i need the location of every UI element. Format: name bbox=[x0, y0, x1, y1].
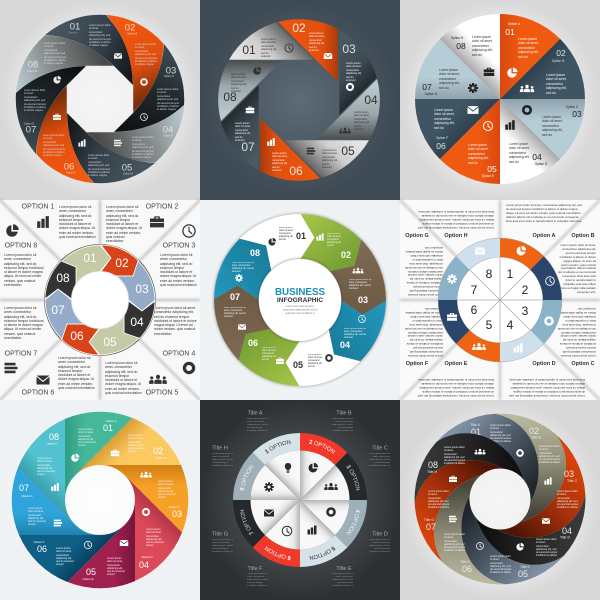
arrow ring: 07 bbox=[51, 303, 65, 317]
segment 08: 08 bbox=[28, 60, 38, 70]
segment 08: 08 bbox=[49, 432, 59, 442]
arrow ring: 08 bbox=[56, 271, 70, 285]
curved option labels: 2 OPTION bbox=[309, 440, 336, 454]
segment 03: Option C bbox=[164, 74, 174, 78]
segment 08: 08 bbox=[428, 460, 438, 470]
segment 02: Option B bbox=[156, 456, 167, 460]
segment 08: 08 bbox=[456, 41, 466, 51]
step numbers: 03 bbox=[358, 295, 368, 305]
title text blocks: Lorem ipsum dolor sit amet, consectetur adipiscing elit, sed do eiusmod tempor incididunt ut labore et bbox=[332, 573, 353, 587]
wheel: 7 bbox=[471, 283, 478, 297]
text blocks: Lorem ipsum dolor sit amet, consectetur adipiscing elit, sed do eiusmod tempor incididunt ut labore et dolore magna aliqua. Ut enim ad minim veniam, quis nostrud exercitation bbox=[154, 306, 197, 336]
centre circle title: Lorem ipsum dolor sit amet, bbox=[286, 305, 315, 308]
segment 08: Option H bbox=[451, 36, 464, 40]
step numbers: 02 bbox=[341, 250, 351, 260]
segment 03: Option C bbox=[168, 505, 180, 509]
segment 04 bbox=[77, 475, 187, 585]
segment 03 bbox=[297, 28, 384, 115]
segment 04: Option D bbox=[163, 134, 173, 138]
segment 07: Lorem ipsum dolor sit amet, consectetur adipiscing elit, sed do eiusmod tempor incididunt ut labore bbox=[428, 490, 449, 509]
segment 03: Lorem ipsum dolor sit amet, consectetur adipiscing elit, sed do bbox=[542, 115, 563, 137]
segment 04: 04 bbox=[364, 93, 378, 107]
segment 01: 01 bbox=[471, 427, 481, 437]
segment 07 bbox=[16, 66, 86, 154]
outer ring bbox=[219, 419, 381, 581]
segment 03: 03 bbox=[564, 469, 574, 479]
text blocks: Lorem ipsum dolor sit amet, consectetur adipiscing elit, sed do bbox=[327, 233, 341, 247]
segment 06 bbox=[412, 469, 548, 600]
segment 03: 03 bbox=[166, 66, 176, 76]
text blocks: Lorem ipsum dolor sit amet, consectetur adipiscing elit, sed do bbox=[279, 227, 293, 241]
segment 02: 02 bbox=[529, 426, 539, 436]
wheel: 5 bbox=[486, 318, 493, 332]
option headings: Option E bbox=[445, 361, 468, 367]
option headings: OPTION 2 bbox=[146, 204, 178, 210]
segment 07: 07 bbox=[241, 140, 255, 154]
text blocks bbox=[4, 205, 197, 400]
option icons bbox=[4, 216, 196, 385]
segment 08 bbox=[440, 0, 542, 99]
title labels bbox=[212, 410, 388, 572]
panel: numbered wheel with option blocks bbox=[400, 200, 600, 400]
panel: octagon shutter with spiral blades bbox=[0, 0, 200, 200]
segment 08: Option H bbox=[27, 69, 37, 73]
segment 04: Option D bbox=[141, 555, 153, 559]
title labels: Title E bbox=[336, 566, 352, 572]
segment 08 bbox=[2, 16, 113, 128]
arrow ring: 06 bbox=[70, 329, 84, 343]
option headings: Option C bbox=[571, 361, 595, 367]
segment 06: Option F bbox=[34, 540, 45, 544]
arrow ring: 03 bbox=[135, 282, 149, 296]
title labels: Title F bbox=[247, 566, 263, 572]
segment 01 bbox=[45, 15, 133, 85]
text blocks bbox=[404, 204, 596, 397]
segment 05 bbox=[68, 500, 135, 588]
curved option labels: 3 OPTION bbox=[346, 464, 360, 490]
segment 08 bbox=[13, 415, 123, 525]
title labels: Title H bbox=[212, 446, 228, 452]
segment 07: Title G bbox=[424, 518, 434, 522]
segment 01: 01 bbox=[242, 43, 256, 57]
segment 08: Lorem ipsum dolor sit amet, consectetur adipiscing elit, sed do eiusmod tempor incididunt ut labore bbox=[444, 446, 465, 465]
segment 07 bbox=[415, 39, 500, 99]
wheel bbox=[425, 225, 575, 375]
segment 07 bbox=[12, 468, 100, 535]
arrow ring: 05 bbox=[103, 335, 117, 349]
title text blocks: Lorem ipsum dolor sit amet, consectetur adipiscing elit, sed do eiusmod tempor incididunt ut labore et bbox=[369, 539, 390, 553]
segment 01: Option A bbox=[508, 22, 521, 26]
step numbers: 07 bbox=[230, 292, 240, 302]
segment 06: Title F bbox=[460, 560, 470, 564]
segment 07: Option G bbox=[21, 494, 33, 498]
segment 01: 01 bbox=[505, 27, 515, 37]
option headings: Option G bbox=[405, 233, 429, 239]
centre circle title: INFOGRAPHIC bbox=[277, 297, 323, 304]
option headings: Option F bbox=[406, 361, 429, 367]
title labels: Title D bbox=[372, 532, 388, 538]
curved option labels: 4 OPTION bbox=[346, 509, 360, 536]
segment 06: 06 bbox=[462, 564, 472, 574]
title text blocks: Lorem ipsum dolor sit amet, consectetur adipiscing elit, sed do eiusmod tempor incididunt ut labore et bbox=[369, 453, 390, 467]
segment 06: Lorem ipsum dolor sit amet, consectetur adipiscing elit, sed do bbox=[434, 108, 455, 130]
segment 05: 05 bbox=[341, 144, 355, 158]
segment 04: Lorem ipsum dolor sit amet, consectetur adipiscing elit, sed do eiusmod tempor incididunt ut labore bbox=[536, 538, 557, 557]
segment 05: 05 bbox=[122, 162, 132, 174]
title labels: Title G bbox=[212, 532, 228, 538]
segment 07: 07 bbox=[19, 483, 29, 493]
segment 01: Title A bbox=[470, 423, 480, 427]
segment 01 bbox=[65, 412, 132, 500]
option headings: Option H bbox=[444, 233, 468, 239]
segment 01: Option A bbox=[106, 419, 116, 423]
segment 03 bbox=[500, 99, 585, 159]
segment 06: Option F bbox=[436, 136, 448, 140]
title text blocks bbox=[212, 418, 390, 588]
segment 04: 04 bbox=[163, 124, 173, 136]
segment 06: 06 bbox=[289, 164, 303, 178]
segment 01: 01 bbox=[70, 22, 80, 32]
step numbers: 04 bbox=[340, 340, 350, 350]
curved option labels: 5 OPTION bbox=[310, 546, 336, 560]
panel: swirl ring bbox=[395, 394, 600, 600]
option headings: OPTION 3 bbox=[163, 242, 195, 250]
arrow ring bbox=[44, 244, 156, 356]
segment 02: Lorem ipsum dolor sit amet, consectetur adipiscing elit, sed do bbox=[546, 73, 567, 95]
disc icons bbox=[264, 463, 338, 536]
segment 07 bbox=[415, 460, 504, 563]
segment 04: 04 bbox=[532, 152, 542, 162]
option headings: OPTION 8 bbox=[5, 242, 37, 250]
segment 03: 03 bbox=[172, 509, 182, 519]
segment 07: 07 bbox=[426, 522, 436, 532]
curved option labels: 8 OPTION bbox=[240, 464, 254, 491]
segment 08: Option H bbox=[46, 442, 58, 446]
option headings: Option B bbox=[571, 233, 595, 239]
segment 02 bbox=[71, 1, 183, 112]
segment 02: 02 bbox=[292, 21, 306, 35]
text blocks: Lorem ipsum dolor sit amet, consectetur adipiscing elit, sed do bbox=[262, 347, 276, 361]
segment 08 bbox=[395, 411, 530, 547]
wheel: 6 bbox=[471, 303, 478, 317]
segment 04: Lorem ipsum dolor sit amet, consectetur adipiscing elit, sed do bbox=[509, 142, 530, 164]
segment 06 bbox=[260, 118, 320, 181]
segment 03 bbox=[114, 44, 184, 132]
segment 05: 05 bbox=[518, 569, 528, 579]
segment 02: 02 bbox=[556, 48, 566, 58]
option headings: OPTION 4 bbox=[163, 350, 195, 358]
segment 02 bbox=[75, 413, 185, 523]
option headings: OPTION 7 bbox=[5, 350, 37, 358]
segment 06: 06 bbox=[436, 141, 446, 151]
segment 07: Option G bbox=[24, 122, 34, 126]
text blocks: Lorem ipsum dolor sit amet, consectetur adipiscing elit, sed do eiusmod tempor incididunt ut labore et dolore magna aliqua. Ut enim ad minim veniam, quis nostrud exercitation bbox=[105, 361, 142, 395]
text blocks: Lorem ipsum dolor sit amet, consectetur adipiscing elit, sed do eiusmod tempor incididunt ut labore et dolore magna aliqua. Ut enim ad minim veniam, quis nostrud exercitation ullamco laboris nisi ut aliquip ex ea commodo consequat. Duis aute irure dolor in reprehenderit in voluptate velit esse cillum dolore eu fugiat nulla pariatur excepteur sint. bbox=[558, 244, 596, 294]
wheel icons bbox=[447, 246, 555, 352]
segment 08 bbox=[218, 61, 281, 121]
option headings: OPTION 6 bbox=[22, 390, 54, 396]
text blocks: Lorem ipsum dolor sit amet, consectetur adipiscing elit, sed do eiusmod tempor incididunt ut labore et dolore magna aliqua. Ut enim ad minim veniam, quis nostrud exercitation bbox=[4, 253, 44, 287]
title labels: Title C bbox=[372, 446, 388, 452]
step numbers: 06 bbox=[248, 338, 258, 348]
text blocks: Lorem ipsum dolor sit amet, consectetur adipiscing elit, sed do eiusmod tempor incididunt ut labore et dolore magna aliqua. Ut enim ad minim veniam, quis nostrud exercitation bbox=[160, 253, 197, 287]
segment 07: Lorem ipsum dolor sit amet, consectetur adipiscing elit, sed do bbox=[439, 68, 460, 90]
title text blocks: Lorem ipsum dolor sit amet, consectetur adipiscing elit, sed do eiusmod tempor incididunt ut labore et bbox=[332, 418, 353, 432]
segment 06 bbox=[15, 477, 125, 587]
text blocks: Lorem ipsum dolor sit amet, consectetur adipiscing elit, sed do bbox=[308, 354, 322, 368]
centre circle title: BUSINESS bbox=[275, 287, 326, 298]
arrow ring: 04 bbox=[130, 315, 144, 329]
segment 01: 01 bbox=[103, 423, 113, 433]
segment 02: Option B bbox=[127, 32, 137, 36]
ring blades bbox=[196, 196, 404, 404]
text blocks: Lorem ipsum dolor sit amet, consectetur adipiscing elit, sed do eiusmod tempor incididunt ut labore et dolore magna aliqua. Ut enim ad minim veniam, quis nostrud exercitation bbox=[106, 205, 142, 243]
curved option labels bbox=[240, 440, 360, 560]
segment 05: Lorem ipsum dolor sit amet, consectetur adipiscing elit, sed do eiusmod tempor incididunt ut labore bbox=[490, 555, 511, 574]
text blocks: Lorem ipsum dolor sit amet, consectetur adipiscing elit, sed do eiusmod bbox=[224, 307, 246, 318]
text blocks: Lorem ipsum dolor sit amet, consectetur adipiscing elit, sed do eiusmod tempor incididunt ut labore et dolore magna aliqua. Ut enim ad minim veniam, quis nostrud exercitation bbox=[4, 306, 44, 340]
text blocks bbox=[224, 227, 373, 376]
segment 03: Title C bbox=[567, 479, 577, 483]
panel: pie chart with eight sectors bbox=[397, 0, 600, 202]
step numbers: 05 bbox=[293, 360, 303, 370]
segment 02 bbox=[278, 19, 338, 82]
segment 01: Lorem ipsum dolor sit amet, consectetur adipiscing elit, sed do eiusmod tempor incididunt ut labore bbox=[490, 424, 511, 443]
option headings bbox=[405, 233, 595, 367]
text blocks: Lorem ipsum dolor sit amet, consectetur adipiscing elit, sed do eiusmod tempor incididunt ut labore et dolore magna aliqua. Ut enim ad minim veniam, quis nostrud exercitation ullamco laboris nisi ut aliquip ex ea commodo consequat. Duis aute irure dolor in reprehenderit in voluptate velit esse cillum dolore eu fugiat nulla pariatur excepteur sint. bbox=[558, 307, 596, 357]
text blocks: Lorem ipsum dolor sit amet, consectetur adipiscing elit, sed do eiusmod bbox=[349, 279, 371, 290]
curved option labels: 6 OPTION bbox=[264, 546, 290, 560]
segment 06: Option F bbox=[66, 170, 76, 174]
curved option labels: 7 OPTION bbox=[240, 510, 254, 536]
arrow ring: 01 bbox=[83, 251, 97, 265]
segment 08: 08 bbox=[223, 90, 237, 104]
segment 01: Lorem ipsum dolor sit amet, consectetur adipiscing elit, sed do bbox=[518, 37, 539, 59]
segment 02: 02 bbox=[153, 446, 163, 456]
segment 04 bbox=[317, 79, 380, 139]
inner disc bbox=[240, 440, 360, 560]
segment 02: Option B bbox=[552, 59, 564, 63]
segment 02: Title B bbox=[531, 436, 542, 440]
option headings bbox=[5, 204, 195, 396]
option headings: OPTION 1 bbox=[22, 204, 54, 210]
segment 07: 07 bbox=[26, 124, 36, 136]
segment 04 bbox=[458, 99, 560, 202]
panel: straight-edged shutter on slate background bbox=[200, 0, 400, 200]
option headings: OPTION 5 bbox=[146, 390, 178, 396]
step numbers: 01 bbox=[296, 231, 306, 241]
step numbers bbox=[230, 231, 368, 370]
title labels: Title A bbox=[247, 410, 263, 416]
segment 06: Lorem ipsum dolor sit amet, consectetur adipiscing elit, sed do eiusmod tempor incididunt ut labore bbox=[444, 533, 465, 552]
text blocks: Lorem ipsum dolor sit amet, consectetur adipiscing elit, sed do eiusmod tempor incididunt ut labore et dolore magna aliqua. Ut enim ad minim veniam, quis nostrud exercitation bbox=[59, 205, 96, 239]
segment 07 bbox=[214, 85, 301, 172]
wheel: 8 bbox=[486, 267, 493, 281]
wheel: 3 bbox=[522, 304, 529, 318]
panel: colourful ring with tangent blades bbox=[0, 400, 200, 600]
segment 05 bbox=[67, 113, 155, 183]
text blocks: Lorem ipsum dolor sit amet, consectetur adipiscing elit, sed do eiusmod tempor incididunt ut labore et dolore magna aliqua. Ut enim ad minim veniam, quis nostrud exercitation ullamco laboris nisi ut aliquip ex ea commodo consequat. Duis aute irure dolor in reprehenderit in voluptate velit esse cillum dolore eu fugiat nulla pariatur excepteur sint. bbox=[405, 307, 443, 357]
segment 02 bbox=[500, 39, 600, 141]
segment 03 bbox=[496, 435, 585, 538]
segment 07: 07 bbox=[422, 82, 432, 92]
segment 01 bbox=[500, 14, 560, 99]
segment 05: Option E bbox=[482, 174, 494, 178]
segment 02 bbox=[452, 394, 588, 529]
segment 04 bbox=[87, 70, 198, 182]
text blocks: Lorem ipsum dolor sit amet, consectetur adipiscing elit, sed do eiusmod bbox=[232, 262, 254, 273]
panel: dark wheel with curved options bbox=[200, 400, 400, 600]
segment 04: Title D bbox=[560, 536, 570, 540]
ring icons bbox=[235, 233, 366, 364]
segment 05: Option E bbox=[123, 172, 133, 176]
title text blocks: Lorem ipsum dolor sit amet, consectetur adipiscing elit, sed do eiusmod tempor incididunt ut labore et bbox=[212, 539, 233, 553]
text blocks: Lorem ipsum dolor sit amet, consectetur adipiscing elit, sed do eiusmod tempor incididunt ut labore et dolore magna aliqua. Ut enim ad minim veniam, quis nostrud exercitation ullamco laboris nisi ut aliquip ex ea commodo consequat. Duis aute irure dolor in reprehenderit in voluptate velit esse cillum dolore eu fugiat nulla pariatur excepteur sint. bbox=[405, 246, 443, 296]
segment 01: Option A bbox=[68, 30, 78, 34]
centre circle title: eiusmod tempor incididunt ut bbox=[285, 312, 315, 315]
title text blocks: Lorem ipsum dolor sit amet, consectetur adipiscing elit, sed do eiusmod tempor incididunt ut labore et bbox=[247, 573, 268, 587]
segment 02: 02 bbox=[125, 22, 135, 34]
segment 04: 04 bbox=[139, 560, 149, 570]
title text blocks: Lorem ipsum dolor sit amet, consectetur adipiscing elit, sed do eiusmod tempor incididunt ut labore et bbox=[212, 453, 233, 467]
panel: business infographic ring bbox=[196, 196, 404, 404]
panel: arrow ring with option blocks bbox=[0, 200, 200, 400]
segment 03: 03 bbox=[342, 42, 356, 56]
segment 05: 05 bbox=[487, 164, 497, 174]
segment 03: Lorem ipsum dolor sit amet, consectetur adipiscing elit, sed do eiusmod tempor incididunt ut labore bbox=[557, 490, 578, 509]
segment 01 bbox=[436, 414, 539, 503]
step numbers: 08 bbox=[250, 248, 260, 258]
segment 07: Option G bbox=[425, 92, 438, 96]
segment 05: Lorem ipsum dolor sit amet, consectetur adipiscing elit, sed do bbox=[468, 143, 489, 165]
option headings: Option A bbox=[532, 233, 556, 239]
segment 03: 03 bbox=[572, 109, 582, 119]
segment 08: Title H bbox=[427, 470, 437, 474]
title text blocks: Lorem ipsum dolor sit amet, consectetur adipiscing elit, sed do eiusmod tempor incididunt ut labore et bbox=[247, 418, 268, 432]
wheel: 4 bbox=[507, 318, 514, 332]
centre circle title: consectetur adipiscing elit, sed do bbox=[283, 308, 318, 312]
segment 02: Lorem ipsum dolor sit amet, consectetur adipiscing elit, sed do eiusmod tempor incididunt ut labore bbox=[539, 445, 560, 464]
arrow ring: 02 bbox=[115, 256, 129, 270]
segment 05: Option E bbox=[83, 577, 94, 581]
centre circle title bbox=[259, 259, 341, 341]
segment 08: Lorem ipsum dolor sit amet, consectetur adipiscing elit, sed do bbox=[472, 35, 493, 57]
segment 06: 06 bbox=[64, 162, 74, 172]
segment 05: 05 bbox=[86, 567, 96, 577]
title labels: Title B bbox=[336, 410, 352, 416]
segment 06: 06 bbox=[37, 544, 47, 554]
segment 03: Option C bbox=[566, 105, 579, 109]
option headings: Option D bbox=[532, 361, 556, 367]
segment 01 bbox=[227, 15, 314, 102]
segment 04 bbox=[470, 451, 600, 587]
curved option labels: 1 OPTION bbox=[265, 440, 291, 454]
segment 04: 04 bbox=[562, 526, 572, 536]
segment 06 bbox=[397, 57, 500, 159]
text blocks: Lorem ipsum dolor sit amet, consectetur adipiscing elit, sed do eiusmod tempor incididunt ut labore et dolore magna aliqua. Ut enim ad minim veniam, quis nostrud exercitation bbox=[58, 356, 95, 390]
segment 05: Title E bbox=[520, 565, 531, 569]
wheel: 1 bbox=[507, 267, 514, 281]
segment 06 bbox=[17, 86, 129, 197]
segment 05 bbox=[284, 98, 371, 185]
segment 03 bbox=[100, 465, 188, 532]
segment 05 bbox=[440, 99, 500, 184]
segment 04: Option D bbox=[535, 162, 548, 166]
wheel: 2 bbox=[522, 283, 529, 297]
segment 05 bbox=[461, 495, 564, 584]
text blocks: Lorem ipsum dolor sit amet, consectetur adipiscing elit, sed do eiusmod bbox=[344, 328, 366, 339]
